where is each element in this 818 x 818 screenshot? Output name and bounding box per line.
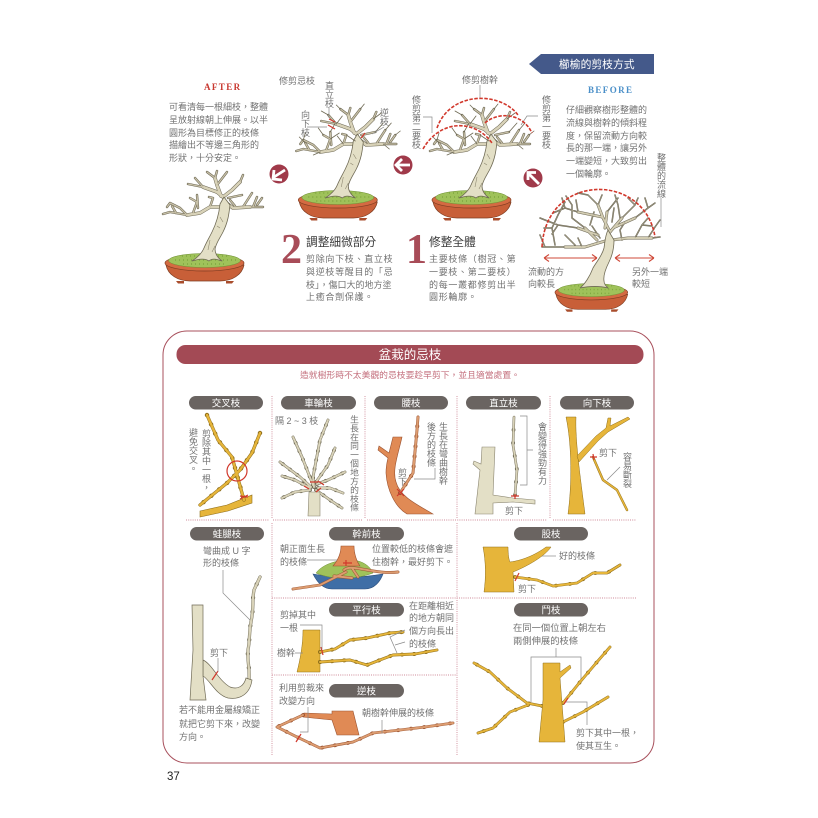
item: frog-leg branch: 形的枝條 — [203, 557, 239, 568]
panel: after: 形狀，十分安定。 — [169, 152, 241, 163]
text: step 1 instructions — [406, 227, 516, 302]
item: upright branch: 會變得強勁有力 — [537, 421, 547, 486]
illustration: before tree — [528, 152, 668, 312]
item: frog-leg branch: 就把它剪下來，改變 — [179, 718, 260, 729]
item: parallel branch: 樹幹 — [277, 647, 295, 658]
item: waist branch — [374, 396, 448, 514]
illustration: before tree: 另外一端 — [632, 266, 668, 277]
panel: before: 一個輪廓。 — [566, 168, 611, 179]
item: frog-leg branch: 蛙腿枝 — [213, 528, 242, 540]
text: step 1 instructions: 一要枝、第二要枝） — [429, 266, 516, 277]
item: waist branch: 剪下 — [397, 467, 407, 487]
item: reverse branch: 利用剪裁來 — [279, 682, 324, 693]
item: parallel branch: 在距離相近 — [409, 600, 454, 611]
item: thigh branch: 剪下 — [518, 583, 536, 594]
panel: after: 圓形為目標修正的枝條 — [169, 127, 259, 138]
text: step 2 instructions: 剪除向下枝、直立枝 — [306, 253, 393, 264]
item: crossing branch: 剪除其中一根， — [201, 428, 211, 492]
illustration: before tree: 向較長 — [528, 278, 555, 289]
panel: after: 呈放射線朝上伸展。以半 — [169, 114, 268, 125]
item: upright branch: 剪下 — [505, 505, 523, 516]
text: step 1 instructions: 的每一叢都修剪出半 — [429, 279, 516, 290]
panel: before: 仔細觀察樹形整體的 — [566, 104, 647, 115]
panel: step 2 tree: 直立枝 — [324, 80, 334, 109]
arrow: after step — [270, 164, 288, 184]
item: thigh branch: 好的枝條 — [559, 550, 595, 561]
item: front-of-trunk branch: 的枝條 — [280, 556, 307, 567]
panel: bad branches — [163, 331, 654, 763]
item: wheel branch — [275, 396, 359, 516]
item: front-of-trunk branch: 位置較低的枝條會遮 — [372, 543, 453, 554]
item: reverse branch — [277, 682, 453, 748]
item: wheel branch: 車輪枝 — [304, 398, 333, 410]
item: parallel branch — [277, 600, 454, 672]
text: step 2 instructions: 2 — [281, 227, 302, 273]
item: downward branch: 剪下 — [599, 447, 617, 458]
item: parallel branch: 一根 — [280, 622, 298, 633]
panel: after: 描繪出不等邊三角形的 — [169, 139, 259, 150]
item: fighting branch: 使其互生。 — [576, 740, 621, 751]
heading: bad branches: 盆栽的忌枝 — [379, 347, 442, 362]
text: step 1 instructions: 1 — [406, 227, 427, 273]
item: thigh branch — [483, 527, 620, 594]
arrow: step 2 — [394, 156, 412, 174]
text: step 2 instructions: 上癒合劑保護。 — [306, 291, 374, 302]
text: subtitle: 造就樹形時不太美觀的忌枝要趁早剪下，並且適當處置。 — [300, 369, 520, 380]
item: thigh branch: 股枝 — [541, 528, 561, 540]
item: frog-leg branch: 若不能用金屬線矯正 — [179, 704, 260, 715]
item: downward branch: 容易斷裂 — [622, 451, 632, 489]
item: frog-leg branch: 剪下 — [210, 647, 228, 658]
item: front-of-trunk branch — [280, 527, 453, 589]
item: waist branch: 腰枝 — [401, 398, 421, 410]
item: parallel branch: 剪掉其中 — [280, 609, 316, 620]
panel: step 1 tree — [411, 74, 551, 220]
banner: title tab — [529, 54, 654, 74]
item: downward branch — [560, 396, 634, 514]
text: step 1 instructions: 主要枝條（樹冠、第 — [429, 253, 516, 264]
item: crossing branch: 交叉枝 — [212, 398, 241, 410]
item: reverse branch: 改變方向 — [279, 695, 315, 706]
item: fighting branch: 鬥枝 — [541, 604, 561, 616]
panel: after: AFTER — [204, 82, 242, 92]
panel: step 2 tree: 逆枝 — [379, 107, 389, 127]
panel: step 1 tree: 修剪第二要枝 — [411, 94, 421, 150]
item: upright branch: 直立枝 — [489, 398, 518, 410]
text: step 2 instructions: 枝」，傷口大的地方塗 — [306, 279, 392, 290]
panel: step 2 tree — [279, 75, 400, 220]
item: wheel branch: 生長在同一個地方的枝條 — [349, 414, 359, 513]
panel: step 2 tree: 向下枝 — [300, 109, 310, 138]
illustration: before tree: 整體的流線 — [656, 152, 666, 198]
text: step 1 instructions: 修整全體 — [429, 235, 476, 249]
item: frog-leg branch — [179, 527, 264, 742]
arrow: step 1 — [524, 168, 542, 188]
item: parallel branch: 的地方朝同 — [409, 612, 454, 623]
panel: before: BEFORE — [588, 85, 633, 95]
item: fighting branch — [474, 603, 639, 751]
item: fighting branch: 在同一個位置上朝左右 — [513, 622, 606, 633]
text: step 1 instructions: 圓形輪廓。 — [429, 291, 478, 302]
item: crossing branch: 避免交叉。 — [188, 427, 198, 473]
panel: before: 長的那一端，讓另外 — [566, 142, 647, 153]
item: parallel branch: 的枝條 — [409, 638, 436, 649]
panel: step 1 tree: 修剪樹幹 — [462, 74, 498, 85]
panel: after — [163, 82, 268, 284]
text: step 2 instructions: 調整細微部分 — [306, 235, 376, 249]
illustration: before tree: 較短 — [632, 278, 650, 289]
item: waist branch: 生長在彎曲樹幹 — [438, 421, 448, 486]
panel: before: 流線與樹幹的傾斜程 — [566, 117, 647, 128]
item: parallel branch: 個方向長出 — [409, 625, 454, 636]
panel: before: 一端變短，大致剪出 — [566, 155, 647, 166]
banner: title tab: 櫛榆的剪枝方式 — [559, 57, 635, 71]
item: reverse branch: 逆枝 — [357, 686, 376, 698]
item: waist branch: 後方的枝條 — [426, 421, 436, 468]
text: step 2 instructions — [281, 227, 393, 302]
item: crossing branch — [188, 396, 263, 517]
item: front-of-trunk branch: 住樹幹，最好剪下。 — [372, 556, 453, 567]
item: wheel branch: 隔 2 ~ 3 枝 — [275, 415, 318, 426]
panel: before — [566, 85, 647, 179]
item: front-of-trunk branch: 朝正面生長 — [280, 543, 325, 554]
item: fighting branch: 剪下其中一根， — [576, 727, 639, 738]
panel: before: 度，保留流動方向較 — [566, 130, 647, 141]
item: frog-leg branch: 方向。 — [179, 731, 206, 742]
item: frog-leg branch: 彎曲成 U 字 — [203, 545, 251, 556]
item: reverse branch: 朝樹幹伸展的枝條 — [362, 707, 434, 718]
text: step 2 instructions: 與逆枝等醒目的「忌 — [306, 266, 393, 277]
item: upright branch — [466, 396, 547, 516]
panel: step 1 tree: 修剪第一要枝 — [541, 94, 551, 150]
page number: 37 — [167, 771, 180, 783]
item: downward branch: 向下枝 — [583, 398, 612, 410]
illustration: before tree: 流動的方 — [528, 266, 564, 277]
item: parallel branch: 平行枝 — [352, 604, 381, 616]
panel: step 2 tree: 修剪忌枝 — [279, 75, 315, 86]
item: front-of-trunk branch: 幹前枝 — [352, 528, 381, 540]
heading: bad branches — [176, 345, 644, 364]
item: fighting branch: 兩側伸展的枝條 — [513, 635, 578, 646]
panel: after: 可看清每一根細枝，整體 — [169, 101, 268, 112]
